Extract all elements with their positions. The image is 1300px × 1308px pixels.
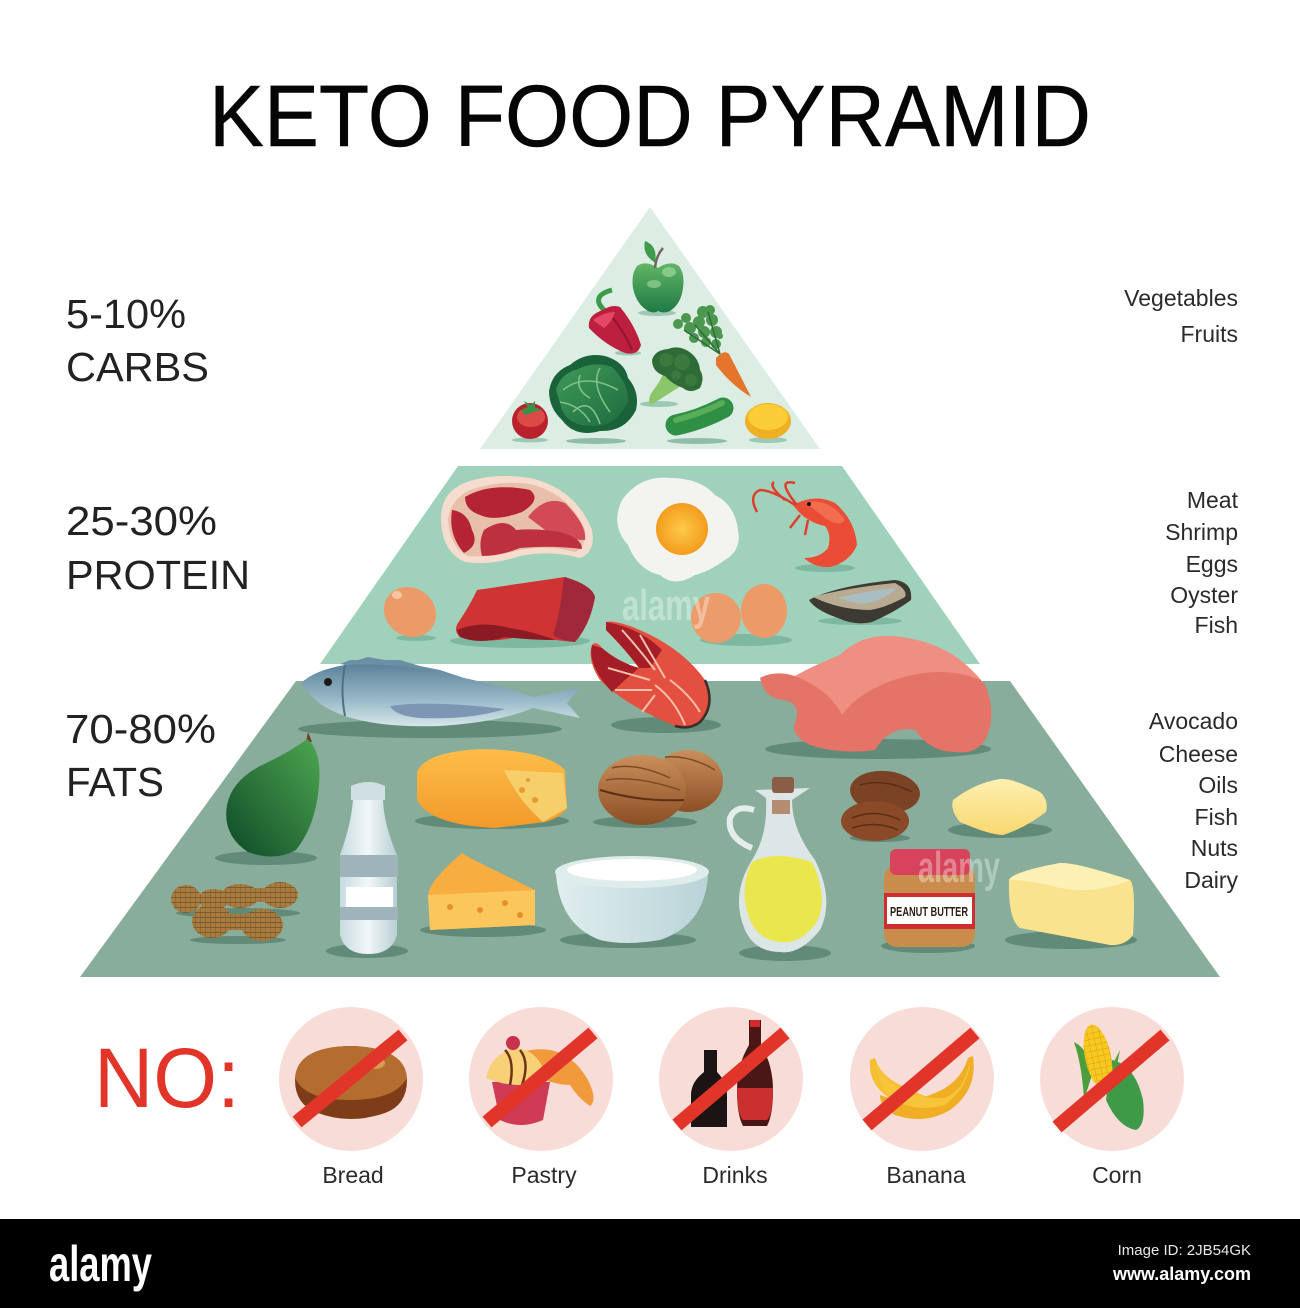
- forbidden item: drinks: Drinks: [702, 1162, 768, 1188]
- faint watermarks: [622, 581, 1000, 892]
- faint watermarks: alamy: [918, 843, 1000, 892]
- right list: protein foods: Shrimp: [1165, 519, 1238, 545]
- icon: walnuts: [593, 750, 723, 828]
- forbidden item: banana: [850, 1007, 994, 1188]
- left label: carbs: [66, 291, 209, 390]
- icon: carrot: [673, 305, 751, 397]
- forbidden item: banana: Banana: [886, 1162, 966, 1188]
- forbidden item: bread: [279, 1007, 423, 1188]
- icon: green apple: [632, 241, 684, 316]
- right list: protein foods: Meat: [1187, 487, 1239, 513]
- website: www.alamy.com: [1112, 1264, 1251, 1284]
- forbidden item: pastry: [469, 1007, 613, 1188]
- forbidden item: bread: Bread: [322, 1162, 384, 1188]
- icon: peanut butter jar: PEANUT BUTTER: [890, 904, 968, 919]
- icon: raw chicken: [760, 636, 992, 759]
- right list: protein foods: Oyster: [1170, 582, 1238, 608]
- icon: red pepper: [589, 290, 641, 356]
- right list: fat foods: Dairy: [1184, 867, 1238, 893]
- forbidden item: corn: Corn: [1092, 1162, 1142, 1188]
- icon: butter block: [1005, 863, 1137, 949]
- image id: Image ID: 2JB54GK: [1118, 1242, 1251, 1259]
- right list: carbs foods: Fruits: [1180, 321, 1238, 347]
- icon: bowl of cottage cheese: [555, 856, 709, 948]
- title: KETO FOOD PYRAMID: [209, 68, 1091, 165]
- icon: avocado: [215, 732, 320, 865]
- left label: carbs: CARBS: [66, 344, 209, 390]
- icon: whole fish: [298, 657, 580, 738]
- alamy logo: alamy: [49, 1236, 152, 1292]
- forbidden item: drinks: [659, 1007, 803, 1188]
- right list: fat foods: Fish: [1195, 804, 1238, 830]
- faint watermarks: alamy: [622, 581, 710, 630]
- right list: protein foods: Eggs: [1186, 551, 1238, 577]
- icon: peanut butter jar: [881, 849, 975, 953]
- forbidden item: corn: [1040, 1007, 1184, 1188]
- right list: fat foods: Nuts: [1191, 835, 1238, 861]
- icon: two brown eggs: [691, 584, 792, 646]
- icon: dates: [841, 768, 922, 842]
- left label: fats: 70-80%: [65, 706, 216, 752]
- right list: protein foods: [1165, 487, 1239, 638]
- right list: protein foods: Fish: [1195, 612, 1238, 638]
- pyramid tier: fats: [80, 622, 1220, 977]
- icon: cucumber: [667, 403, 727, 444]
- icon: shrimp: [753, 482, 857, 572]
- right list: fat foods: Oils: [1198, 772, 1238, 798]
- icon: brown egg left: [374, 577, 446, 647]
- right list: fat foods: Avocado: [1149, 708, 1238, 734]
- right list: fat foods: [1149, 708, 1238, 893]
- left label: protein: PROTEIN: [66, 552, 250, 598]
- left label: fats: [65, 706, 216, 805]
- icon: salmon steak: [591, 622, 721, 733]
- right list: fat foods: Cheese: [1159, 741, 1238, 767]
- left label: protein: [66, 498, 250, 598]
- icon: cheese wheel: [415, 749, 569, 829]
- pyramid tier: carbs: [480, 207, 820, 449]
- footer bar: [0, 1219, 1300, 1308]
- icon: olive oil jug: [730, 777, 831, 961]
- icon: fried egg: [617, 478, 739, 582]
- left label: fats: FATS: [66, 759, 164, 805]
- left label: carbs: 5-10%: [66, 291, 186, 337]
- right list: carbs foods: Vegetables: [1124, 285, 1238, 311]
- no heading: NO:: [94, 1031, 240, 1125]
- icon: broccoli: [640, 347, 702, 407]
- forbidden item: pastry: Pastry: [511, 1162, 577, 1188]
- icon: raw steak: [441, 476, 593, 563]
- icon: beef chunk: [450, 577, 595, 648]
- right list: carbs foods: [1124, 285, 1238, 347]
- icon: milk bottle: [326, 782, 408, 958]
- icon: cheese wedge: [420, 853, 546, 937]
- icon: cabbage: [549, 355, 637, 444]
- icon: peanuts: [171, 882, 300, 944]
- pyramid tier: protein: [320, 466, 980, 664]
- icon: tomato: [512, 401, 548, 442]
- icon: oyster: [809, 580, 911, 625]
- left label: protein: 25-30%: [66, 498, 217, 544]
- icon: small butter: [948, 779, 1052, 838]
- icon: lemon: [745, 403, 791, 443]
